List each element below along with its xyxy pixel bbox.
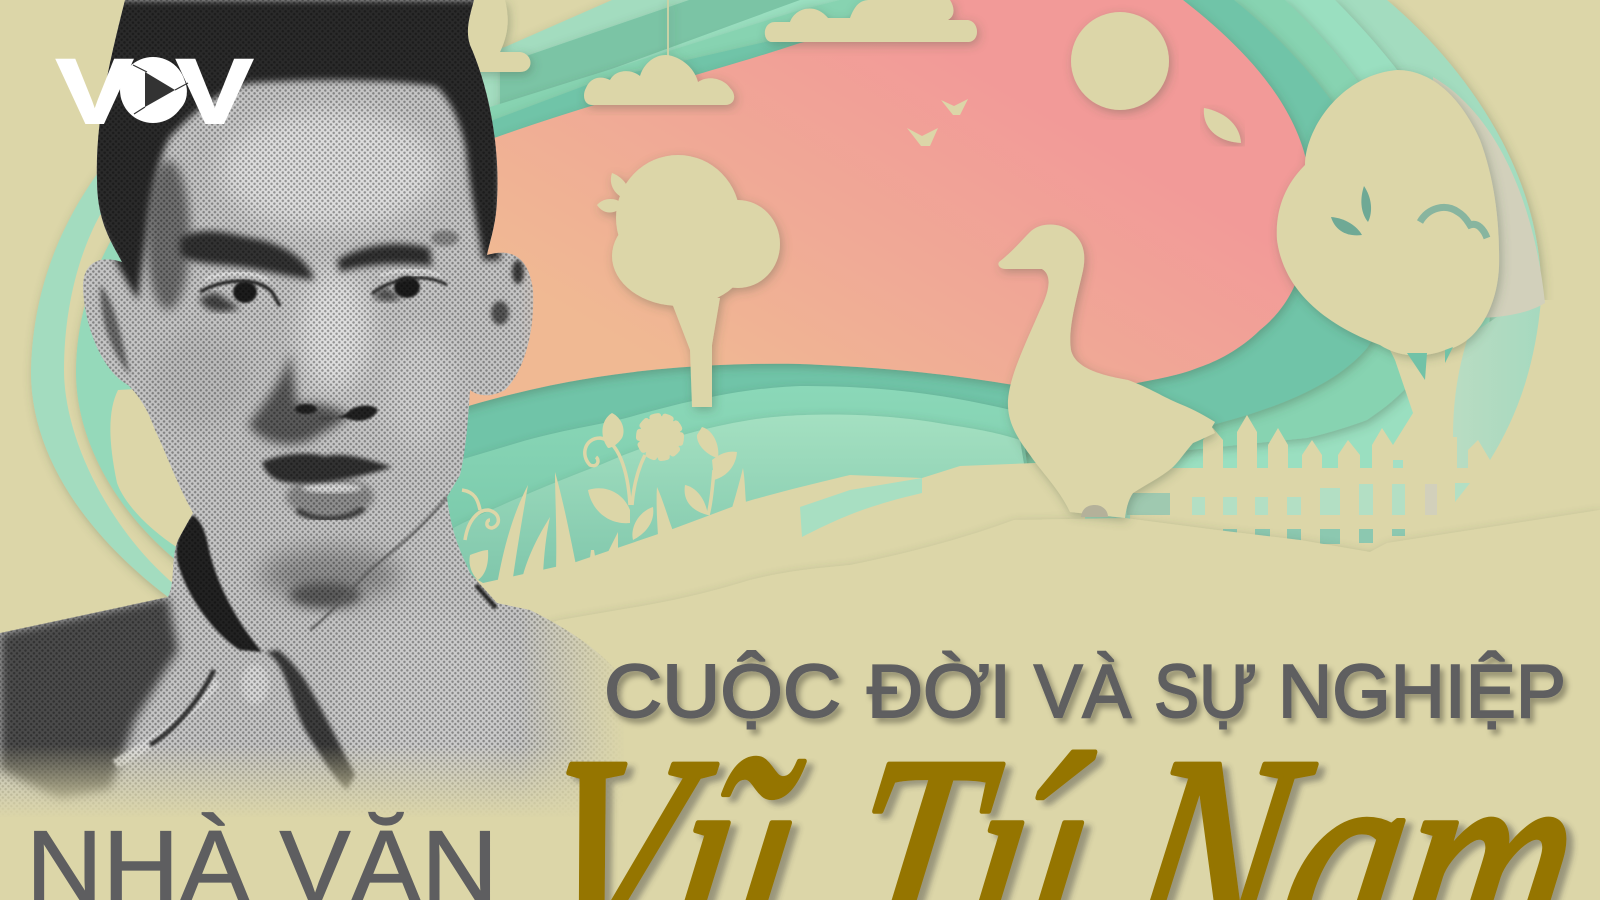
chin line and neck shadow [289, 497, 447, 630]
hanging cloud [584, 0, 734, 105]
subtitle: SỰ [1154, 649, 1257, 733]
goose [998, 224, 1215, 518]
green hills [440, 386, 1040, 600]
birds [907, 99, 968, 146]
left tree [597, 155, 780, 407]
eyes [199, 270, 447, 312]
light green strip [800, 478, 922, 537]
subtitle: CUỘC [604, 649, 841, 733]
temple shadow [146, 160, 190, 310]
halftone screen [0, 0, 612, 809]
logo: VOV: V [56, 41, 133, 143]
logo: VOV: V [176, 41, 253, 143]
shirt and skin base [0, 0, 598, 800]
outer green layers [31, 0, 1541, 620]
front hill [0, 510, 1600, 900]
dark green ring [440, 0, 1392, 540]
hair [90, 0, 500, 300]
face tones [162, 106, 444, 612]
heading: name [512, 695, 1600, 900]
grey crescent [1430, 77, 1545, 318]
sun [1071, 12, 1169, 110]
top-row gap [1393, 460, 1403, 468]
branch gaps [1407, 347, 1453, 380]
ear shading [100, 260, 524, 375]
subtitle: NGHIỆP [1278, 649, 1566, 733]
subtitle: VÀ [1034, 649, 1131, 733]
logo: VOV: O [121, 52, 189, 131]
right cream block with trunk base [1393, 300, 1600, 560]
grassy foreground [470, 462, 1085, 660]
fence [1127, 415, 1470, 560]
goose foot [1081, 505, 1108, 517]
grass spikes [497, 468, 746, 585]
flowers and plants [469, 413, 737, 580]
brows [180, 231, 432, 280]
collar button [241, 664, 269, 704]
canopy leaf cut-outs [1331, 186, 1371, 235]
subtitle [604, 649, 1566, 733]
right pale band [1453, 300, 1541, 468]
pink sky [440, 0, 1311, 415]
plant stems and curls [462, 438, 714, 540]
canopy [1277, 70, 1499, 355]
pickets and rails [1130, 415, 1393, 560]
subtitle: ĐỜI [867, 649, 1011, 733]
lower-row gaps [1223, 529, 1405, 544]
left shoulder shadow [0, 597, 178, 800]
collar shadows [112, 515, 496, 790]
mouth [262, 454, 392, 519]
clouds [460, 0, 977, 105]
small cloud behind hair [460, 0, 530, 72]
logo: VOV [56, 41, 253, 143]
nose [248, 352, 378, 444]
faint right brow tail [431, 230, 459, 246]
canopy arc cut-out [1420, 207, 1487, 238]
trunk [1385, 340, 1455, 440]
portrait photo [0, 0, 615, 812]
right tree [1277, 70, 1545, 440]
middle-row gaps [1127, 483, 1470, 515]
top cloud [765, 0, 977, 42]
falling leaf [1204, 108, 1241, 143]
